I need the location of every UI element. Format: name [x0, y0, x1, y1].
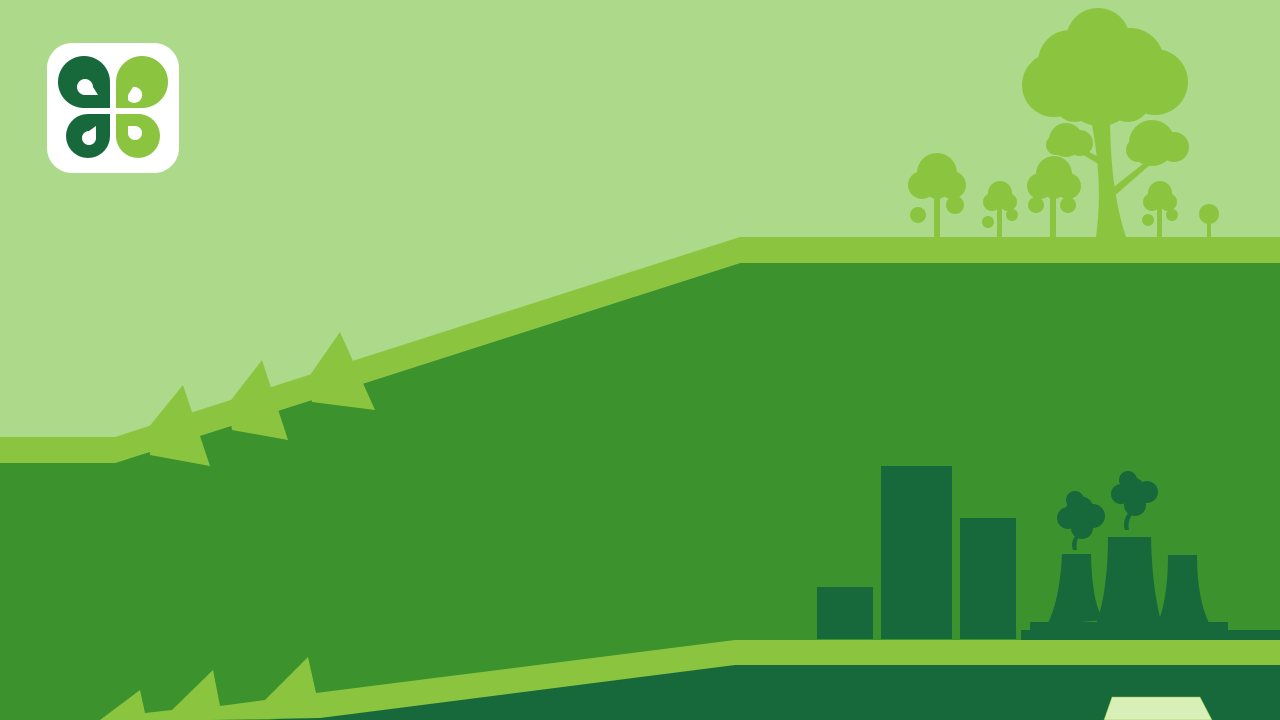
mid ground green	[0, 263, 1280, 720]
logo top-left leaf	[58, 56, 110, 108]
smoke	[1066, 496, 1094, 524]
trees	[908, 8, 1219, 237]
arrow teeth upper	[148, 385, 210, 466]
logo bottom-right leaf	[116, 114, 160, 158]
logo bottom-left leaf	[66, 114, 110, 158]
big tree	[1066, 8, 1130, 72]
lower ground band	[100, 640, 1280, 720]
factory buildings	[817, 466, 1280, 640]
lower dark ground	[100, 665, 1280, 720]
logo top-right leaf	[116, 56, 168, 108]
small trees	[917, 153, 957, 193]
solar panel	[1104, 697, 1212, 720]
upper ground band	[0, 237, 1280, 466]
logo	[47, 43, 179, 173]
